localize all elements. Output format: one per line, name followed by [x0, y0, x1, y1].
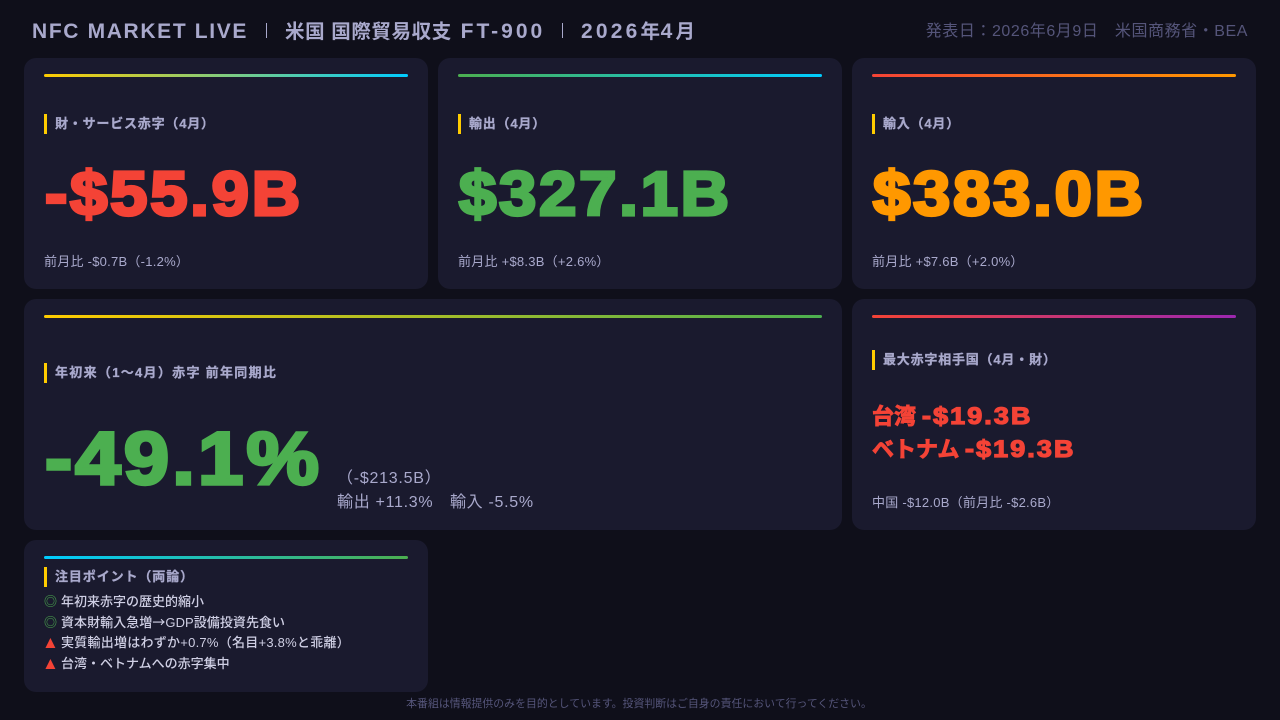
point: caution: 台湾・ベトナムへの赤字集中	[61, 656, 230, 671]
point: caution: ▲	[42, 633, 59, 652]
accent bar	[44, 315, 822, 318]
accent bar	[458, 74, 822, 77]
panel: imports	[852, 58, 1256, 289]
panel label: 財・サービス赤字（4月）	[55, 116, 215, 131]
point: positive: 年初来赤字の歴史的縮小	[61, 594, 204, 609]
China comparison: 中国 -$12.0B（前月比 -$2.6B）	[872, 495, 1060, 510]
exports value: $327.1B	[459, 160, 732, 229]
panel label: 年初来（1〜4月）赤字 前年同期比	[55, 365, 277, 380]
panel label: 注目ポイント（両論）	[55, 569, 194, 584]
panel: exports	[438, 58, 842, 289]
deficit value: -$55.9B	[45, 160, 303, 229]
footer disclaimer: 本番組は情報提供のみを目的としています。投資判断はご自身の責任において行ってください。	[406, 698, 872, 710]
point: positive: 資本財輸入急増→GDP設備投資先食い	[61, 612, 285, 631]
point list	[42, 594, 350, 673]
year to date amount: （-$213.5B）	[337, 470, 441, 487]
imports value: $383.0B	[873, 160, 1146, 229]
panel label	[44, 567, 194, 587]
report name: 米国 国際貿易収支 FT-900	[285, 20, 545, 43]
panel: trade deficit	[24, 58, 428, 289]
month-on-month change: 前月比 -$0.7B（-1.2%）	[44, 254, 189, 269]
report month: 2026年4月	[581, 20, 696, 43]
partner values: 台湾	[872, 404, 916, 429]
accent bar	[44, 74, 408, 77]
partner values: -$19.3B	[965, 436, 1076, 463]
year to date value: -49.1%	[45, 417, 322, 500]
accent bar	[872, 74, 1236, 77]
panel label: 最大赤字相手国（4月・財）	[883, 352, 1057, 367]
exports and imports change: 輸出 +11.3% 輸入 -5.5%	[337, 494, 534, 511]
month-on-month change: 前月比 +$8.3B（+2.6%）	[458, 254, 610, 269]
point: caution: ▲	[42, 654, 59, 673]
brand name: NFC MARKET LIVE	[32, 20, 248, 43]
panel label	[458, 114, 546, 134]
point: caution: 実質輸出増はわずか+0.7%（名目+3.8%と乖離）	[61, 635, 350, 650]
panel: points of attention	[24, 540, 428, 692]
partner values: ベトナム	[872, 437, 959, 462]
panel label: 輸入（4月）	[883, 116, 960, 131]
month-on-month change: 前月比 +$7.6B（+2.0%）	[872, 254, 1024, 269]
separator	[266, 23, 267, 38]
panel: year to date	[24, 299, 842, 530]
accent bar	[44, 556, 408, 559]
panel label: 輸出（4月）	[469, 116, 546, 131]
partner values: -$19.3B	[922, 403, 1033, 430]
accent bar	[872, 315, 1236, 318]
panel: largest deficit partners	[852, 299, 1256, 530]
panel label	[872, 114, 960, 134]
partner values	[872, 403, 1076, 463]
header title	[32, 20, 696, 43]
separator	[562, 23, 563, 38]
release date and source: 発表日：2026年6月9日 米国商務省・BEA	[926, 23, 1248, 40]
point: positive: ◎	[44, 594, 57, 609]
point: positive: ◎	[44, 615, 57, 630]
